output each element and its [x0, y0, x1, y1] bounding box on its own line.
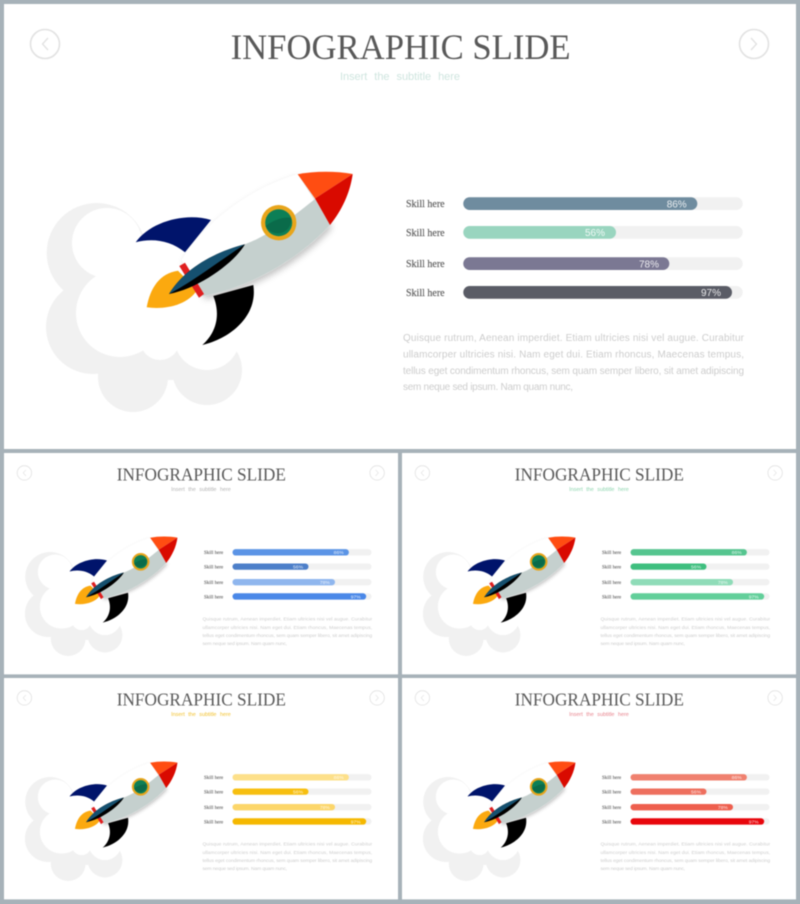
cloud illustration: [423, 552, 524, 656]
rocket illustration: [468, 536, 575, 623]
skill bar 3: [406, 257, 743, 270]
skill bar 2: 56%: [293, 565, 304, 571]
panel: green slide: [402, 453, 796, 674]
skill bar 1: [406, 197, 743, 210]
skill bar 4: Skill here: [602, 595, 622, 600]
skill bar 3: 78%: [718, 805, 728, 811]
skill bar 3: [204, 804, 372, 811]
icon: next arrow: [370, 466, 384, 480]
skill bar 1: Skill here: [406, 199, 445, 210]
body text: sem neque sed ipsum. Nam quam nunc,: [403, 382, 573, 393]
body text: ullamcorper ultricies nisi. Nam eget dui. Etiam rhoncus, Maecenas tempus,: [601, 625, 770, 631]
icon: previous arrow: [30, 30, 60, 58]
icon: next arrow: [370, 691, 384, 705]
subtitle: Insert the subtitle here: [340, 71, 460, 83]
title: INFOGRAPHIC SLIDE: [515, 464, 684, 484]
body text: tellus eget condimentum rhoncus, sem quam semper libero, sit amet adipiscing: [403, 366, 744, 377]
body text: [601, 617, 770, 647]
title: INFOGRAPHIC SLIDE: [117, 464, 286, 484]
skill bar 2: Skill here: [204, 790, 224, 795]
skill bar 3: Skill here: [204, 581, 224, 586]
body text: Quisque rutrum, Aenean imperdiet. Etiam ultricies nisi vel augue. Curabitur: [403, 333, 745, 344]
body text: Quisque rutrum, Aenean imperdiet. Etiam ultricies nisi vel augue. Curabitur: [601, 842, 770, 848]
skill bar 1: [602, 774, 770, 781]
body text: ullamcorper ultricies nisi. Nam eget dui. Etiam rhoncus, Maecenas tempus,: [203, 850, 372, 856]
skill bar 1: 86%: [667, 200, 687, 210]
skill bar 3: [602, 579, 770, 586]
skill bar 4: [204, 818, 372, 825]
skill bar 3: [204, 579, 372, 586]
icon: next arrow: [768, 691, 782, 705]
skill bar 3: 78%: [320, 805, 330, 811]
rocket illustration: [136, 172, 353, 345]
icon: next arrow: [768, 466, 782, 480]
skill bar 1: Skill here: [602, 551, 622, 556]
title: INFOGRAPHIC SLIDE: [515, 689, 684, 709]
skill bar 1: Skill here: [602, 776, 622, 781]
skill bar 1: Skill here: [204, 551, 224, 556]
skill bar 3: Skill here: [204, 806, 224, 811]
skill bar 4: 97%: [749, 819, 759, 825]
skill bar 4: [602, 818, 770, 825]
skill bar 2: [602, 788, 770, 796]
skill bar 4: Skill here: [204, 595, 224, 600]
body text: sem neque sed ipsum. Nam quam nunc,: [601, 866, 685, 872]
panel: blue slide: [4, 453, 398, 674]
body text: sem neque sed ipsum. Nam quam nunc,: [203, 866, 287, 872]
skill bar 3: Skill here: [406, 259, 445, 270]
body text: [403, 333, 745, 393]
icon: previous arrow: [17, 466, 32, 480]
skill bar 3: Skill here: [602, 806, 622, 811]
body text: tellus eget condimentum rhoncus, sem quam semper libero, sit amet adipiscing: [601, 858, 770, 864]
skill bar 3: 78%: [639, 260, 659, 270]
body text: ullamcorper ultricies nisi. Nam eget dui. Etiam rhoncus, Maecenas tempus,: [203, 625, 372, 631]
body text: [601, 842, 770, 872]
skill bar 1: 86%: [732, 775, 742, 781]
subtitle: Insert the subtitle here: [171, 487, 231, 493]
body text: tellus eget condimentum rhoncus, sem quam semper libero, sit amet adipiscing: [203, 633, 372, 639]
cloud illustration: [46, 203, 250, 412]
subtitle: Insert the subtitle here: [569, 712, 629, 718]
skill bar 2: Skill here: [204, 565, 224, 570]
skill bar 2: 56%: [585, 228, 605, 239]
skill bar 1: 86%: [334, 550, 344, 556]
subtitle: Insert the subtitle here: [171, 712, 231, 718]
skill bar 1: [204, 774, 372, 781]
skill bar 1: [602, 549, 770, 556]
skill bar 2: Skill here: [602, 790, 622, 795]
skill bar 1: [204, 549, 372, 556]
icon: previous arrow: [17, 691, 32, 705]
body text: tellus eget condimentum rhoncus, sem quam semper libero, sit amet adipiscing: [203, 858, 372, 864]
title: INFOGRAPHIC SLIDE: [231, 27, 571, 67]
cloud illustration: [25, 777, 126, 881]
body text: Quisque rutrum, Aenean imperdiet. Etiam ultricies nisi vel augue. Curabitur: [601, 617, 770, 623]
icon: next arrow: [740, 30, 768, 58]
icon: previous arrow: [415, 466, 430, 480]
skill bar 2: 56%: [293, 790, 304, 796]
skill bar 1: 86%: [732, 550, 742, 556]
skill bar 3: Skill here: [602, 581, 622, 586]
panel: yellow slide: [4, 678, 398, 899]
skill bar 2: 56%: [691, 790, 702, 796]
skill bar 2: [602, 563, 770, 571]
panel: red slide: [402, 678, 796, 899]
skill bar 4: Skill here: [204, 820, 224, 825]
skill bar 4: Skill here: [602, 820, 622, 825]
skill bar 3: 78%: [320, 580, 330, 586]
skill bar 3: [602, 804, 770, 811]
subtitle: Insert the subtitle here: [569, 487, 629, 493]
skill bar 2: [406, 226, 743, 239]
skill bar 2: [204, 563, 372, 571]
title: INFOGRAPHIC SLIDE: [117, 689, 286, 709]
skill bar 2: Skill here: [406, 228, 445, 239]
skill bar 4: 97%: [749, 594, 759, 600]
skill bar 4: [204, 593, 372, 600]
rocket illustration: [70, 761, 177, 848]
body text: [203, 842, 372, 872]
skill bar 4: 97%: [351, 819, 361, 825]
skill bar 1: 86%: [334, 775, 344, 781]
skill bar 4: 97%: [701, 288, 721, 299]
skill bar 4: 97%: [351, 594, 361, 600]
rocket illustration: [468, 761, 575, 848]
body text: sem neque sed ipsum. Nam quam nunc,: [203, 641, 287, 647]
skill bar 2: 56%: [691, 565, 702, 571]
skill bar 4: Skill here: [406, 288, 445, 299]
body text: Quisque rutrum, Aenean imperdiet. Etiam ultricies nisi vel augue. Curabitur: [203, 842, 372, 848]
body text: ullamcorper ultricies nisi. Nam eget dui. Etiam rhoncus, Maecenas tempus,: [403, 350, 744, 360]
skill bar 4: [406, 286, 743, 299]
icon: previous arrow: [415, 691, 430, 705]
body text: [203, 617, 372, 647]
panel: main slide: [4, 4, 796, 449]
skill bar 3: 78%: [718, 580, 728, 586]
body text: ullamcorper ultricies nisi. Nam eget dui. Etiam rhoncus, Maecenas tempus,: [601, 850, 770, 856]
body text: tellus eget condimentum rhoncus, sem quam semper libero, sit amet adipiscing: [601, 633, 770, 639]
cloud illustration: [423, 777, 524, 881]
skill bar 2: Skill here: [602, 565, 622, 570]
body text: Quisque rutrum, Aenean imperdiet. Etiam ultricies nisi vel augue. Curabitur: [203, 617, 372, 623]
rocket illustration: [70, 536, 177, 623]
skill bar 2: [204, 788, 372, 796]
skill bar 4: [602, 593, 770, 600]
cloud illustration: [25, 552, 126, 656]
skill bar 1: Skill here: [204, 776, 224, 781]
body text: sem neque sed ipsum. Nam quam nunc,: [601, 641, 685, 647]
